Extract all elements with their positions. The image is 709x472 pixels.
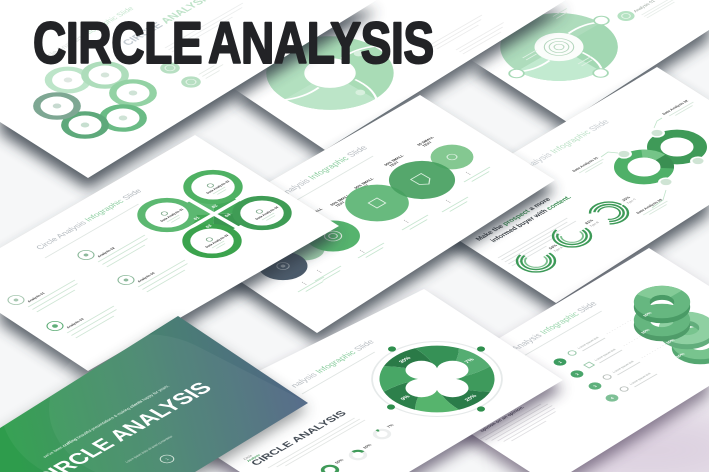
chart: four petal rings: Data Analysis 01 (159, 208, 185, 223)
item: analysis 02: Analysis 02 (96, 247, 116, 258)
chart: stacked 3d rings (633, 286, 709, 364)
text: tag circle analysis: Circle (242, 454, 253, 461)
chart: small stat 7 (372, 423, 401, 440)
item: analysis 04: Analysis 04 (136, 272, 156, 283)
panel: slide top centre donut (233, 0, 566, 160)
labels: small text heads: 90% SMALL (383, 154, 405, 167)
labels: small text heads: TEXT (359, 184, 371, 191)
panel: slide right figure eight (415, 67, 709, 313)
labels: small text heads (311, 135, 439, 215)
list: numbered rows: 2 (574, 372, 581, 376)
chart: arc gauge 35 (582, 190, 649, 228)
text: faint slide copy (430, 12, 511, 59)
chart: four petal rings: 03 (204, 224, 213, 229)
list: numbered rows: Lorem ipsum text (593, 348, 617, 362)
list: numbered rows (551, 317, 673, 403)
item: analysis 04 (115, 250, 194, 295)
chart: stacked 3d rings: 30% (665, 338, 676, 345)
chart: four petal rings: Data Analysis 03 (204, 234, 230, 249)
item: analysis 01: Analysis 01 (26, 292, 46, 303)
chart: interlocked rings (611, 126, 709, 188)
chart: arc gauge 81 (545, 214, 611, 252)
chart: arc gauge 35: 35% (620, 195, 632, 202)
chart: small stat 30 (348, 443, 379, 461)
text: cover tagline: we've been crafting beautiful presentations & making clients happy for years. (42, 384, 171, 459)
chart: four segment donut (468, 0, 657, 104)
chart: small stat 7: 7% (385, 423, 395, 429)
chart: four petal rings (131, 166, 298, 262)
panel: slide left four petals (0, 135, 339, 381)
panel: slide top right donut (468, 0, 709, 132)
chart: clover pie: 30% (398, 356, 413, 365)
text: strategy copy (472, 396, 563, 449)
heading: slide title: nalysis Infographic Slide (523, 118, 611, 169)
chart: arc gauge 54 (509, 239, 575, 276)
markers: four green dots (387, 346, 485, 412)
icon: cover circle: 1 (164, 457, 171, 461)
labels: small text heads: 55 SMALL (416, 135, 436, 147)
icon: small circle one (156, 60, 184, 76)
chart: four petal rings: 02 (210, 204, 219, 209)
label: data analysis 02: Data Analysis 02 (661, 99, 689, 116)
chart: arc gauge 54: Type A (552, 246, 564, 253)
chart: small stat 50: 50% (333, 458, 345, 465)
item: analysis 03: Analysis 03 (65, 318, 85, 329)
text: headline make the prospect: informed buyer with content. (489, 195, 573, 244)
text: faint copy lines (165, 3, 250, 52)
item: analysis 02 (75, 225, 154, 270)
chart: stacked 3d rings: 30% (675, 352, 686, 359)
chart: four petal rings: Data Analysis 04 (254, 206, 280, 221)
chart: small stat 30: 30% (361, 443, 373, 450)
label: data analysis 03 (635, 197, 670, 218)
text: body lines (498, 217, 583, 266)
heading: slide title: Circle Analysis Infographic Slide (34, 187, 144, 251)
text: subtitle line (302, 352, 375, 394)
icon: analysis badge (614, 0, 686, 26)
chart: four petal rings: 04 (223, 213, 232, 218)
text: subtitle line (45, 204, 139, 258)
chart: clover pie (345, 326, 529, 432)
chart: stacked 3d rings: 30% (640, 328, 651, 335)
text: cover small line: Lorem ipsum dolor sit amet consectetur (124, 435, 174, 464)
panel: slide lower right stacked rings (408, 248, 709, 472)
chart: arc gauge 35: Type C (625, 197, 638, 205)
panel: slide bottom centre clover pie (160, 289, 563, 472)
chart: arc gauge 81: 81% (583, 218, 595, 225)
item: analysis 03 (44, 296, 123, 341)
label: data analysis 03: Data Analysis 03 (635, 198, 663, 215)
list: numbered rows: 1 (557, 360, 564, 364)
heading: slide title: Analysis Infographic Slide (509, 300, 599, 352)
chart: stacked 3d rings: 30% (642, 311, 653, 318)
heading: slide title: Analysis Infographic Slide (276, 144, 370, 198)
chart: six ring circle (28, 58, 162, 142)
heading: faint infographic title: Circle Analysis Infographic Slide (36, 5, 136, 63)
heading: circle analysis: CIRCLE ANALYSIS (249, 409, 350, 468)
title: CIRCLE ANALYSIS (33, 12, 434, 76)
icon: small circle two (177, 60, 229, 90)
chart: clover pie: 20% (464, 394, 479, 403)
text: body lines (268, 416, 365, 472)
decoration: faint cover circles (0, 316, 308, 472)
labels: small text heads: TEXT (422, 141, 434, 148)
heading: slide title: nalysis Infographic Slide (288, 338, 377, 389)
label: data analysis 02 (661, 98, 696, 118)
chart: clover pie: 7% (464, 357, 476, 365)
labels: small text heads: MALL (311, 207, 324, 215)
item: analysis 01 (5, 270, 84, 315)
labels: small text heads: TEXT (389, 161, 401, 168)
labels: small text heads: TEXT (335, 201, 347, 208)
list: numbered rows: Lorem ipsum text (576, 336, 600, 350)
chart: small stat 50 (320, 458, 351, 472)
list: numbered rows: Lorem ipsum text (628, 372, 652, 386)
chart: large donut (238, 20, 424, 127)
chart: growing circles (248, 140, 482, 286)
panel: cover slide green (0, 316, 308, 472)
label: data analysis 01 (571, 155, 606, 176)
label: data analysis 01: Data Analysis 01 (571, 156, 599, 173)
text: headline make the prospect: Make the prospect a more (475, 197, 553, 242)
labels: small text heads: 50% SMALL (329, 194, 351, 207)
text: subtitle line (290, 156, 373, 204)
list: numbered rows: 4 (609, 396, 616, 400)
icon: cover circle (157, 454, 177, 464)
text: tag circle analysis (242, 451, 261, 462)
list: numbered rows: Lorem ipsum text (611, 360, 635, 374)
connectors: figure eight leaders (601, 118, 666, 208)
labels: circle captions (298, 167, 493, 294)
list: numbered rows: 3 (592, 384, 599, 388)
panel: slide centre growing circles (174, 95, 555, 343)
chart: arc gauge 81: Type B (588, 221, 600, 228)
panel: slide top left rings (0, 0, 377, 189)
text: strategy copy: opinion on an opinion. (479, 405, 525, 433)
chart: clover pie: 9% (400, 394, 412, 402)
chart: four petal rings: Data Analysis 02 (205, 180, 231, 195)
text: tag circle analysis: Analysis (246, 453, 261, 463)
labels: small text heads: 90% SMALL (353, 177, 375, 190)
text: subtitle line (522, 311, 602, 357)
chart: arc gauge 54: 54% (547, 243, 559, 250)
background tint bottom right (530, 400, 709, 472)
chart: four petal rings: 01 (192, 216, 201, 221)
